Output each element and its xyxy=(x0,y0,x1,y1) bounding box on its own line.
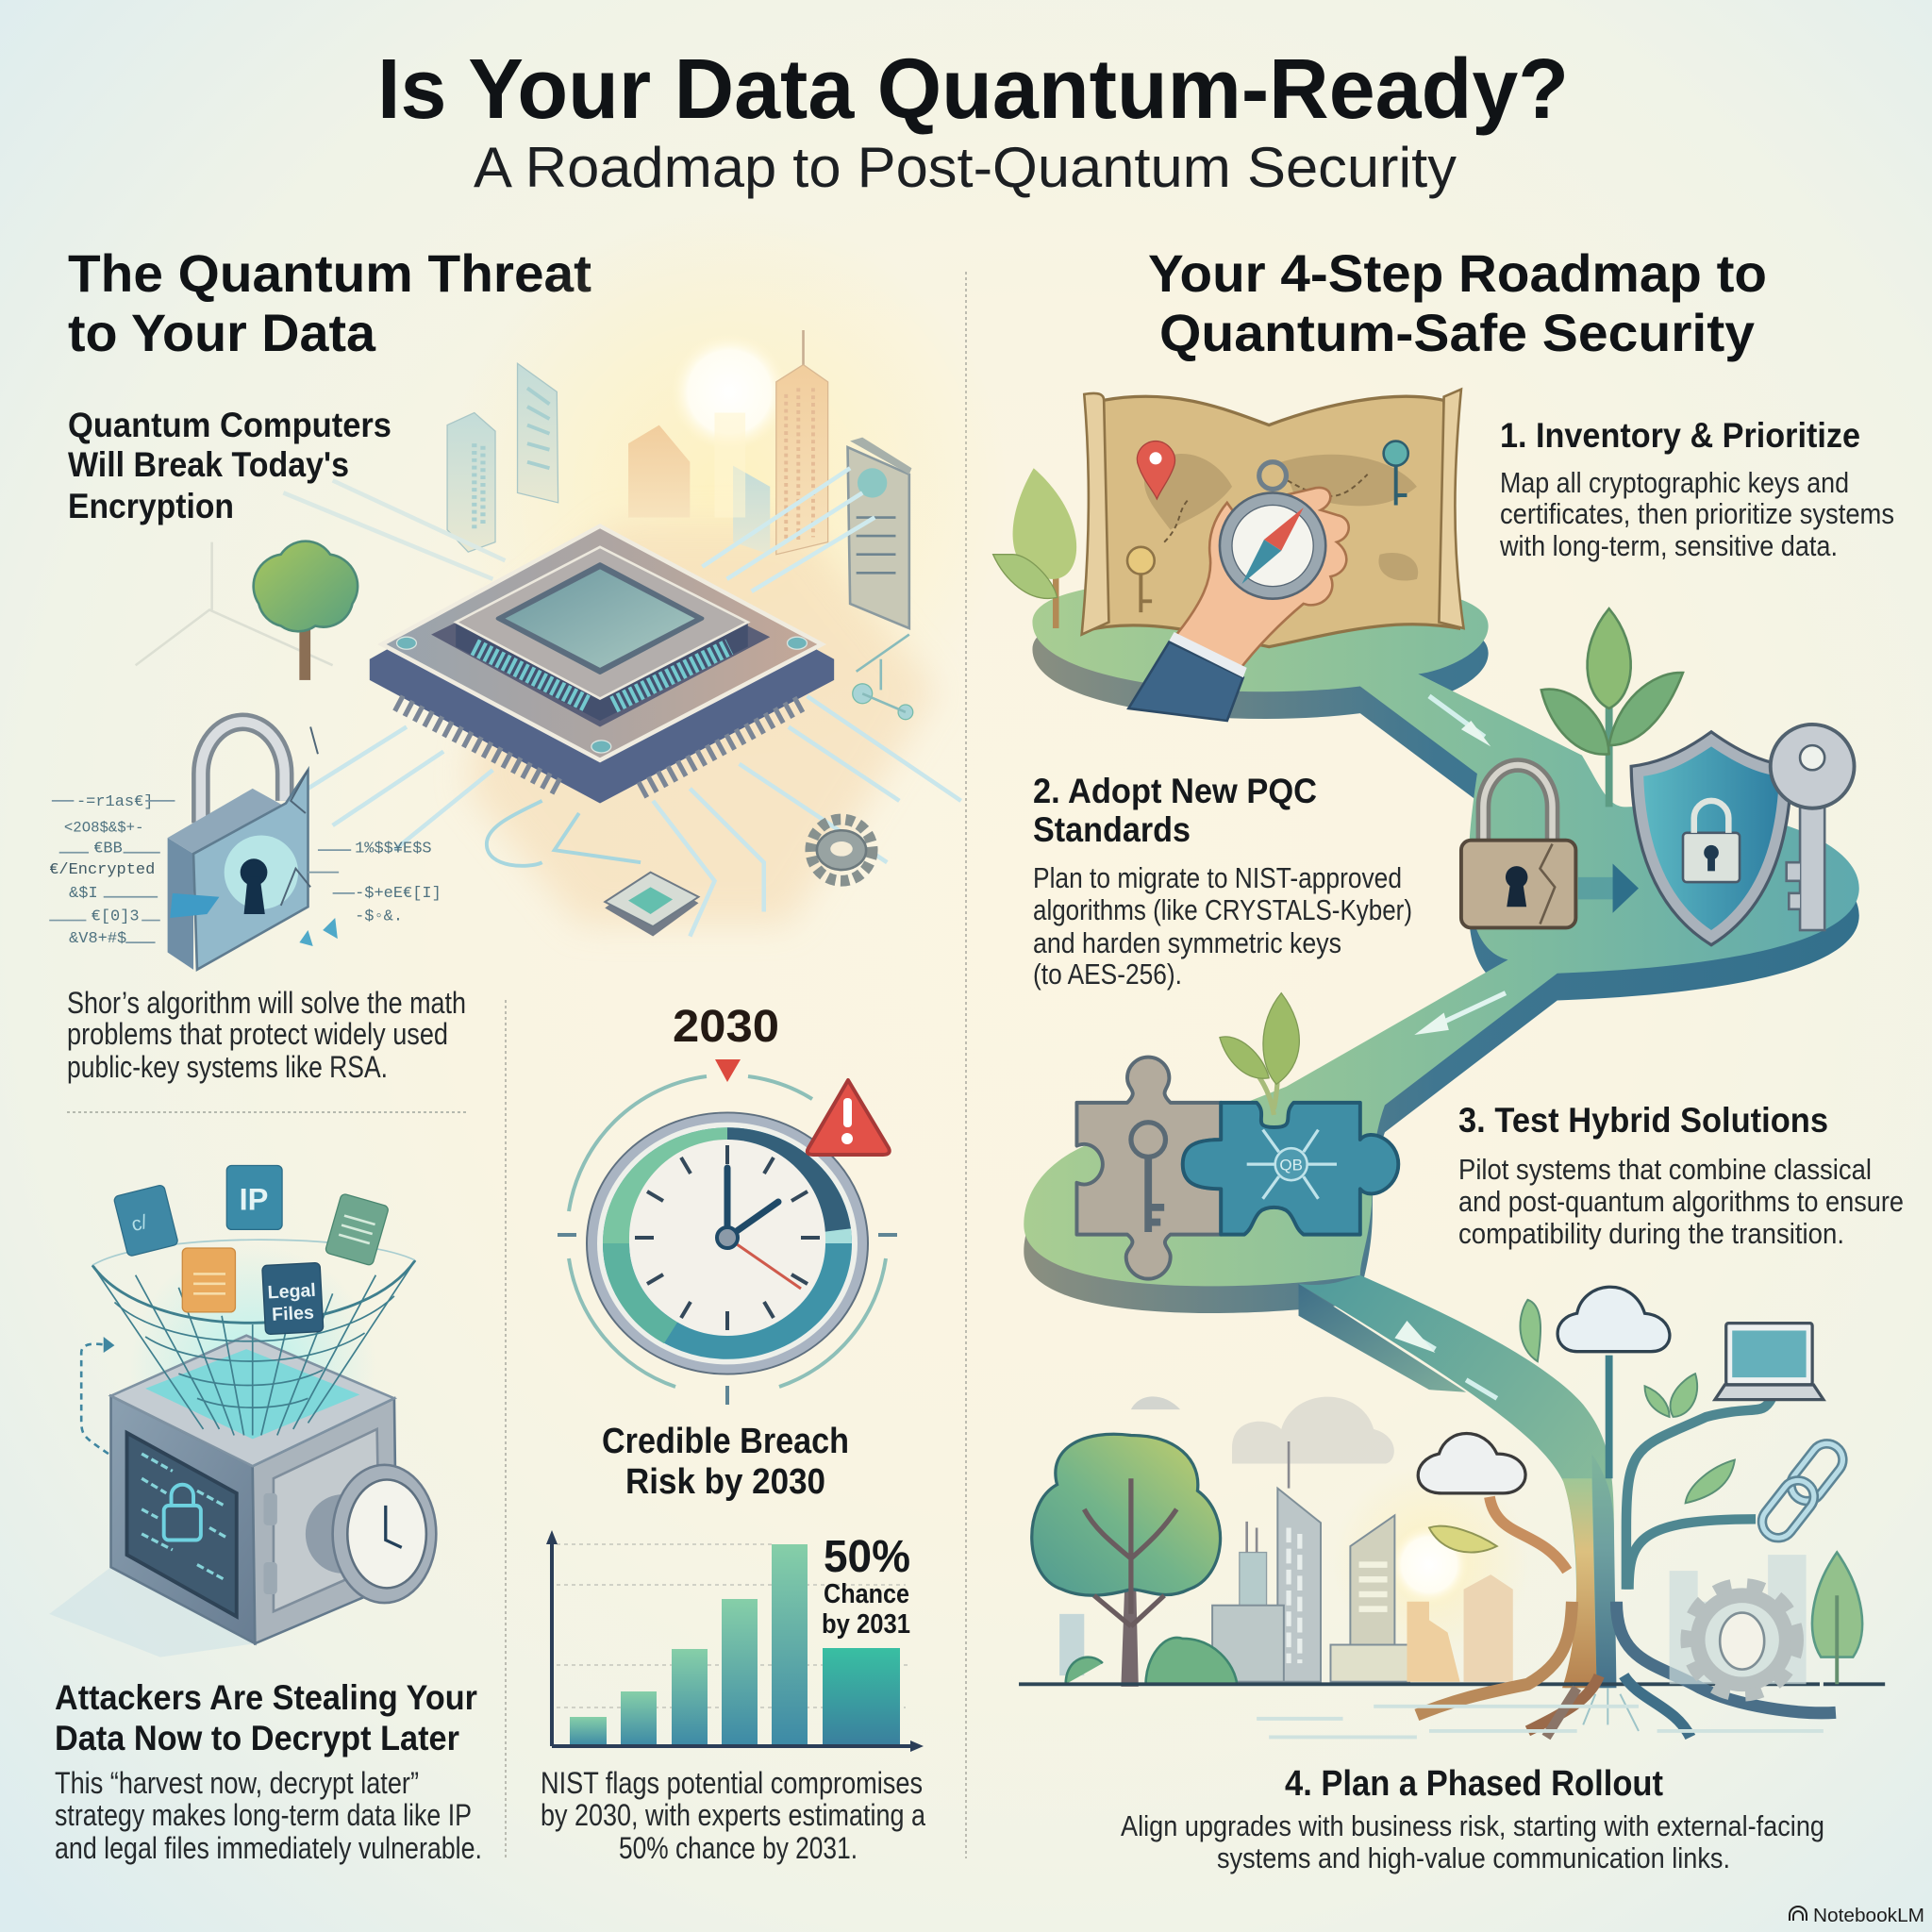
bar chart: Chance xyxy=(824,1579,909,1609)
step 1 text: 1. Inventory & Prioritize xyxy=(1500,416,1860,455)
encrypted code fragments: -$+eE€[I] xyxy=(355,885,441,903)
arrow to shield xyxy=(1578,864,1639,913)
step 2 text xyxy=(1033,772,1412,991)
NotebookLM watermark: NotebookLM xyxy=(1813,1906,1924,1926)
icon: shield xyxy=(1631,732,1791,945)
tree xyxy=(1032,1434,1237,1684)
panel: the quantum threat heading xyxy=(68,243,591,362)
text: quantum computers will break: Encryption xyxy=(68,487,234,525)
step 1 text: Map all cryptographic keys and xyxy=(1500,466,1849,499)
data files: Files xyxy=(272,1303,314,1325)
icon: chain link xyxy=(1756,1437,1849,1544)
text: NIST flags xyxy=(541,1766,925,1865)
data funnel net xyxy=(92,1240,415,1435)
data files: c/ xyxy=(129,1211,150,1236)
text: attackers are stealing: Data Now to Decrypt Later xyxy=(55,1719,459,1757)
encrypted code fragments: €BB xyxy=(93,841,123,858)
icon: pine tree xyxy=(1812,1553,1862,1684)
step 3 text xyxy=(1458,1101,1904,1250)
icon: sprout xyxy=(1541,608,1683,807)
icon: gear xyxy=(810,819,873,881)
tree xyxy=(254,541,358,680)
icon: small cloud xyxy=(1418,1434,1525,1493)
skyline right xyxy=(1670,1555,1807,1684)
icon: broken padlock xyxy=(168,722,338,970)
text: harvest now: strategy makes long-term data like IP xyxy=(55,1798,472,1832)
text: shor's algorithm: public-key systems like RSA. xyxy=(67,1050,388,1084)
path top surface xyxy=(1024,579,1859,1286)
icon: puzzle sprout xyxy=(1220,993,1299,1115)
encrypted code fragments: <2O8$&$+- xyxy=(64,820,143,837)
step 1 text xyxy=(1499,416,1894,562)
scene: rollout landscape xyxy=(1019,1287,1885,1737)
step 2 text: (to AES-256). xyxy=(1033,958,1182,991)
heading: 4-step roadmap xyxy=(1148,243,1767,362)
icon: hand with compass xyxy=(1128,462,1349,721)
encrypted code fragments: -=r1as€] xyxy=(76,793,153,811)
step 3 text: 3. Test Hybrid Solutions xyxy=(1458,1101,1828,1140)
data files: IP xyxy=(240,1181,268,1216)
text: credible breach: Risk by 2030 xyxy=(625,1462,825,1502)
panel: the quantum threat heading: The Quantum Threat xyxy=(68,243,591,303)
text: quantum computers will break xyxy=(68,406,391,525)
text: NIST flags: NIST flags potential compromises xyxy=(541,1766,923,1800)
data files: Legal xyxy=(267,1280,316,1304)
heading: 4-step roadmap: Your 4-Step Roadmap to xyxy=(1148,243,1767,303)
text: credible breach: Credible Breach xyxy=(602,1422,849,1461)
heading: 4-step roadmap: Quantum-Safe Security xyxy=(1159,303,1755,362)
text: harvest now: and legal files immediately vulnerable. xyxy=(55,1831,482,1865)
chip xyxy=(370,526,834,804)
text: attackers are stealing xyxy=(55,1678,477,1757)
text: harvest now xyxy=(55,1766,482,1865)
title: Is Your Data Quantum-Ready? xyxy=(377,42,1569,137)
path side shadow xyxy=(1024,607,1859,1313)
icon: small chip xyxy=(605,873,699,937)
subtitle: A Roadmap to Post-Quantum Security xyxy=(474,136,1457,199)
text: NIST flags: 50% chance by 2031. xyxy=(619,1831,858,1865)
bar chart: 50% xyxy=(824,1532,910,1582)
icon: puzzle pieces xyxy=(1076,1058,1398,1279)
icon: key xyxy=(1771,724,1855,930)
step 3 text: compatibility during the transition. xyxy=(1458,1217,1844,1250)
encrypted code fragments: €/Encrypted xyxy=(49,861,155,879)
icon: warning triangle xyxy=(808,1080,890,1155)
big year 2030: 2030 xyxy=(673,1002,779,1052)
icon: red marker xyxy=(715,1059,741,1082)
step 4 text: Align upgrades with business risk, starting with external-facing xyxy=(1121,1809,1824,1842)
step 4 text: 4. Plan a Phased Rollout xyxy=(1285,1764,1663,1804)
step 2 text: Standards xyxy=(1033,810,1191,849)
icon: countdown clock xyxy=(558,1076,897,1405)
encrypted code fragments: &$I xyxy=(69,885,98,903)
text: shor's algorithm: problems that protect widely used xyxy=(67,1017,448,1051)
step 2 text: 2. Adopt New PQC xyxy=(1033,772,1317,810)
vault box xyxy=(111,1336,436,1643)
text: NIST flags: by 2030, with experts estimating a xyxy=(541,1798,925,1832)
icon: left small tree xyxy=(993,468,1076,628)
text: harvest now: This “harvest now, decrypt later” xyxy=(55,1766,419,1800)
icon: puzzle pieces: QB xyxy=(1279,1157,1303,1174)
step 1 text: with long-term, sensitive data. xyxy=(1499,529,1838,562)
encrypted code fragments xyxy=(49,793,441,948)
icon: big cloud xyxy=(1557,1287,1670,1352)
icon: gear xyxy=(1687,1585,1797,1695)
text: shor's algorithm: Shor’s algorithm will solve the math xyxy=(67,986,466,1020)
step 2 text: and harden symmetric keys xyxy=(1033,926,1341,959)
encrypted code fragments: 1%$$¥E$S xyxy=(355,841,432,858)
text: shor's algorithm xyxy=(67,986,466,1084)
step 4 text xyxy=(1121,1764,1824,1874)
encrypted code fragments: €[0]3 xyxy=(92,908,140,926)
text: attackers are stealing: Attackers Are Stealing Your xyxy=(55,1678,477,1717)
icon: old broken padlock xyxy=(1461,765,1575,927)
text: credible breach xyxy=(602,1422,849,1502)
roadmap path illustration xyxy=(993,390,1885,1737)
step 4 text: systems and high-value communication links. xyxy=(1217,1841,1730,1874)
bar chart xyxy=(546,1530,924,1752)
text: quantum computers will break: Quantum Computers xyxy=(68,406,391,444)
illustration: quantum chip and city xyxy=(49,209,1010,970)
step 3 text: Pilot systems that combine classical xyxy=(1458,1153,1872,1186)
center divider xyxy=(965,272,967,1858)
ground line xyxy=(1019,1683,1885,1686)
panel: the quantum threat heading: to Your Data xyxy=(68,303,376,362)
encrypted code fragments: &V8+#$ xyxy=(69,930,126,948)
city xyxy=(1059,1441,1513,1682)
step 2 text: Plan to migrate to NIST-approved xyxy=(1033,861,1402,894)
step 2 text: algorithms (like CRYSTALS-Kyber) xyxy=(1033,893,1412,926)
data files xyxy=(113,1165,389,1335)
illustration: harvest vault xyxy=(49,1165,436,1657)
bar chart: by 2031 xyxy=(822,1609,910,1640)
road to rollout xyxy=(1299,1275,1616,1688)
icon: laptop xyxy=(1715,1324,1824,1400)
text: quantum computers will break: Will Break Today's xyxy=(68,445,349,484)
encrypted code fragments: -$◦&. xyxy=(355,908,403,926)
icon: treasure map xyxy=(1082,390,1464,647)
tree of systems trunk xyxy=(1417,1300,1836,1737)
